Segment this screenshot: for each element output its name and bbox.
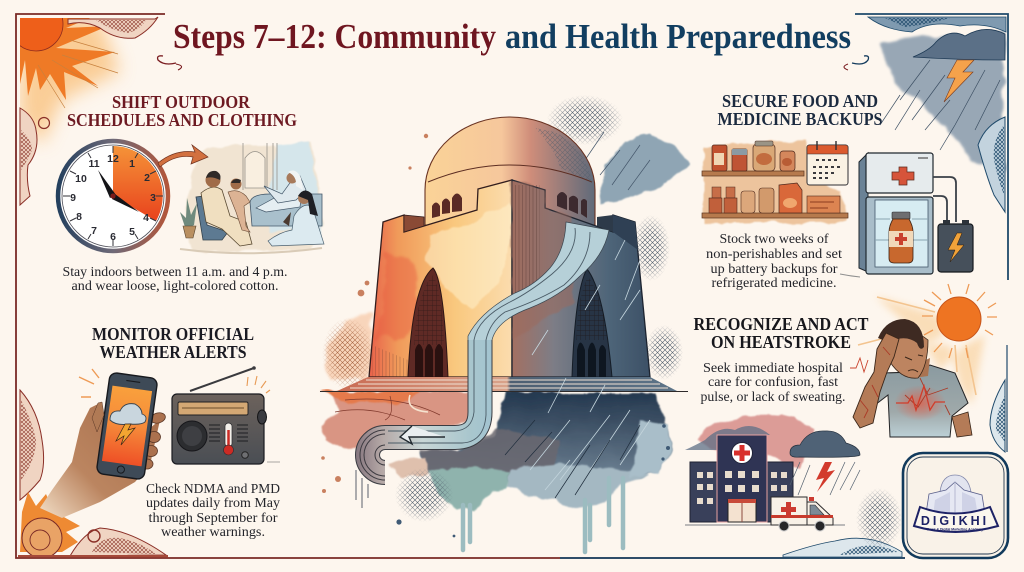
illustration: mausoleum split by heat and flood [320, 95, 690, 552]
icon: clock 11 to 4 [58, 141, 168, 251]
icon: clock 11 to 4: 3 [150, 192, 156, 204]
text: seek hospital [700, 361, 846, 405]
title: Steps 7–12: Community [173, 18, 496, 56]
heading: secure food: SECURE FOOD AND [722, 91, 878, 111]
text: stock two weeks: refrigerated medicine. [712, 276, 836, 291]
icon: clock 11 to 4: 11 [88, 158, 100, 170]
heading: monitor official [92, 324, 254, 362]
panel: secure food and medicine [702, 91, 973, 291]
text: stock two weeks: Stock two weeks of [720, 232, 829, 247]
icon: sun [858, 284, 997, 405]
icon: clock 11 to 4: 2 [144, 172, 150, 184]
ornament: top left sun corner [20, 16, 158, 206]
text: stay indoors [62, 265, 288, 294]
logo: Digikhi badge: DIGIKHI [921, 514, 989, 528]
icon: clock 11 to 4: 5 [129, 226, 135, 238]
icon: radio with thermometer [172, 366, 280, 464]
text: seek hospital: Seek immediate hospital [703, 361, 843, 376]
washes and storm clouds around the mausoleum [321, 95, 690, 552]
arrow: clock to indoors [158, 145, 208, 167]
panel: shift outdoor schedules [58, 92, 324, 294]
icon: person with heatstroke [850, 319, 972, 437]
text: check NDMA: through September for [148, 511, 278, 526]
icon: clock 11 to 4: 10 [75, 173, 87, 185]
illustration: family resting indoors [180, 142, 324, 253]
icon: clock 11 to 4: 12 [107, 153, 119, 165]
heading: shift outdoor [67, 92, 297, 130]
text: seek hospital: pulse, or lack of sweating. [700, 390, 846, 405]
icon: clock 11 to 4: 6 [110, 231, 116, 243]
building right face storm side [512, 180, 650, 377]
title: and Health Preparedness [505, 18, 851, 56]
ornament: bottom left sun corner [18, 390, 168, 558]
icon: clock 11 to 4: 8 [76, 211, 82, 223]
heading: secure food: MEDICINE BACKUPS [718, 109, 882, 129]
text: stock two weeks: non-perishables and set [706, 247, 842, 262]
heading: recognize: RECOGNIZE AND ACT [694, 314, 869, 334]
heading: shift outdoor: SHIFT OUTDOOR [112, 92, 250, 112]
text: check NDMA [146, 482, 280, 540]
heading: recognize: ON HEATSTROKE [711, 332, 851, 352]
icon: clock 11 to 4: 1 [129, 158, 135, 170]
icon: clock 11 to 4: 7 [91, 225, 97, 237]
dome [425, 117, 595, 225]
text: stay indoors: and wear loose, light-colored cotton. [72, 279, 278, 294]
building front face hot side [369, 180, 512, 377]
heading: shift outdoor: SCHEDULES AND CLOTHING [67, 110, 297, 130]
icon: fridge with medicine and battery [840, 153, 973, 277]
ornament: top right storm corner [868, 17, 1006, 212]
logo: Digikhi badge: News & Digital Marketing Academy [927, 528, 983, 532]
text: check NDMA: Check NDMA and PMD [146, 482, 280, 497]
icon: hand holding phone [40, 369, 167, 518]
panel: recognize heatstroke [685, 284, 997, 531]
heading: recognize [694, 314, 869, 352]
icon: calendar [807, 141, 848, 185]
icon: clock 11 to 4: 9 [70, 192, 76, 204]
icon: hospital in storm [685, 415, 860, 525]
steps and horizon [320, 377, 688, 498]
heading: monitor official: MONITOR OFFICIAL [92, 324, 254, 344]
text: seek hospital: care for confusion, fast [708, 375, 838, 390]
title [158, 18, 869, 70]
ornament: bottom right corner [783, 380, 1005, 557]
icon: clock 11 to 4: 4 [143, 212, 149, 224]
text: check NDMA: updates daily from May [146, 496, 280, 511]
heading: secure food [718, 91, 882, 129]
water flow with arrow [356, 222, 609, 508]
heading: monitor official: WEATHER ALERTS [100, 342, 246, 362]
text: stock two weeks: up battery backups for [710, 262, 838, 277]
icon: ambulance [771, 497, 833, 531]
icon: pantry shelves [702, 140, 848, 224]
title underline flourish [158, 56, 869, 70]
text: stock two weeks [706, 232, 842, 291]
logo: Digikhi badge [903, 453, 1008, 558]
text: stay indoors: Stay indoors between 11 a.m. and 4 p.m. [62, 265, 288, 280]
panel: monitor weather alerts [40, 324, 280, 540]
text: check NDMA: weather warnings. [161, 525, 265, 540]
